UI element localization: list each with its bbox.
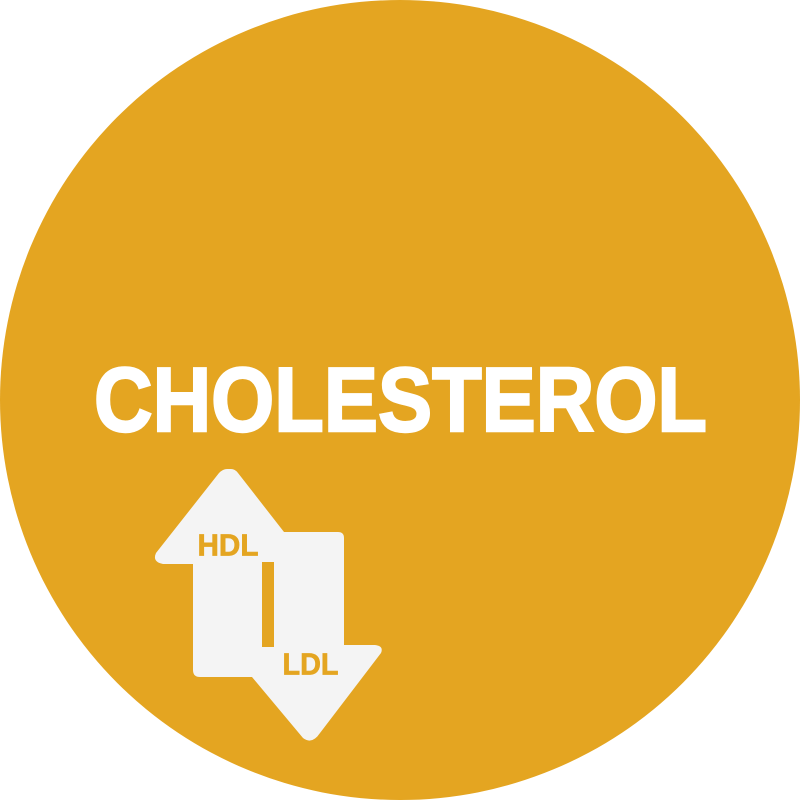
label: HDL: HDL — [198, 528, 258, 562]
title: CHOLESTEROL — [94, 350, 707, 451]
divider bar — [262, 562, 274, 647]
icon: HDL up and LDL down arrows — [155, 469, 382, 741]
icon: arrows shape — [155, 469, 382, 741]
label: LDL: LDL — [282, 646, 338, 682]
